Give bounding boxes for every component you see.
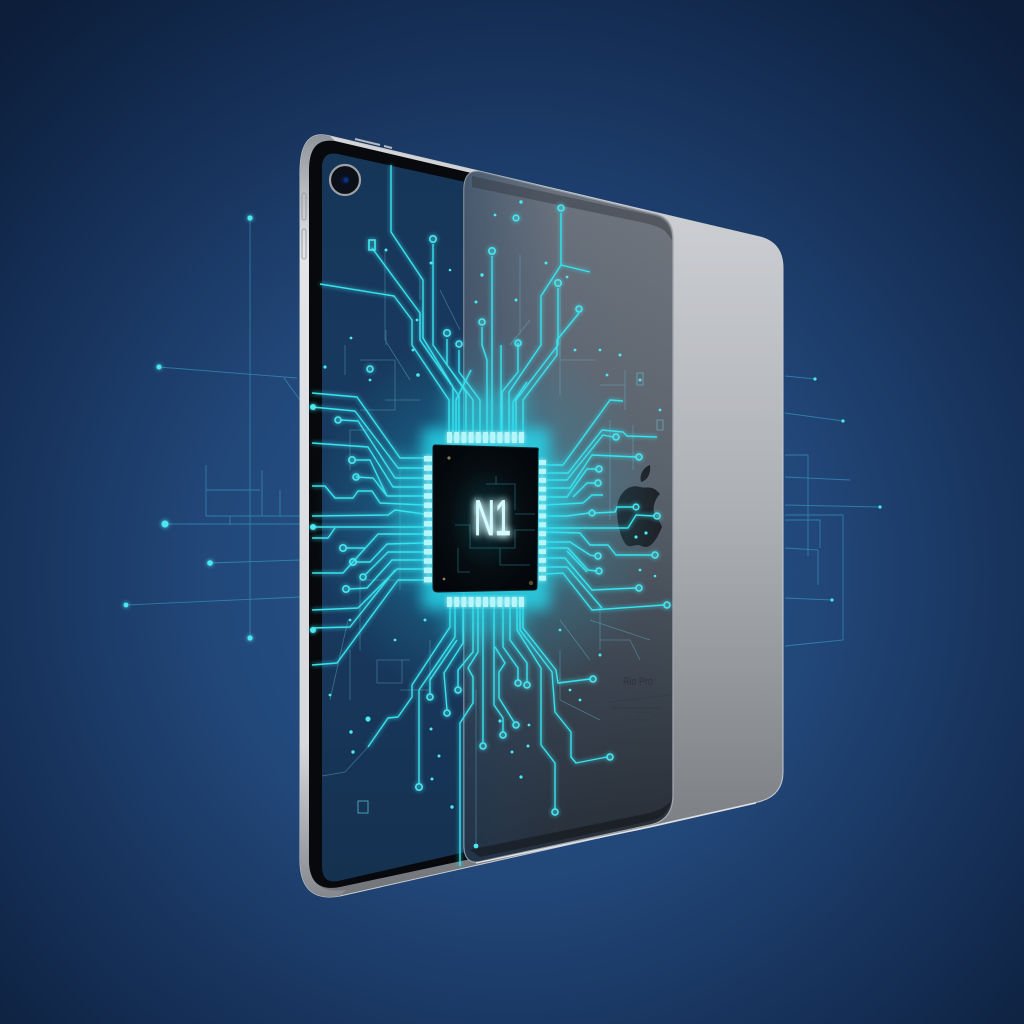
- right background circuit lines: [785, 376, 882, 646]
- model name text: Rio Pro: [623, 676, 653, 688]
- top circuit traces: [320, 165, 590, 432]
- apple logo: [617, 465, 662, 547]
- soft glow around chip: [422, 428, 550, 610]
- tablet side rim: [300, 135, 346, 897]
- chip halo glow: [311, 328, 661, 708]
- chip inner circuitry: [455, 476, 535, 572]
- left contact pads: [424, 456, 432, 582]
- bottom contact pads: [447, 597, 524, 607]
- chip label N1: N1: [474, 490, 511, 546]
- small squares: [637, 373, 663, 690]
- top contact pads: [447, 432, 524, 443]
- bottom circuit traces: [368, 607, 613, 866]
- glass dark top band: [472, 176, 672, 240]
- glass dark bottom band: [470, 800, 671, 857]
- scattered data dots: [323, 200, 661, 848]
- glass panel: [464, 171, 673, 862]
- blue screen: [322, 154, 470, 881]
- model name text: [608, 676, 670, 720]
- camera lens: [330, 165, 360, 195]
- left circuit traces: [310, 393, 424, 665]
- glow behind trace bundles: [392, 392, 574, 637]
- chip corner screws: [443, 456, 533, 585]
- side buttons: [302, 139, 392, 259]
- square marker: [358, 801, 368, 813]
- N1 processor chip: [433, 445, 538, 592]
- left background circuit lines: [124, 215, 300, 641]
- black bezel: [309, 141, 480, 888]
- faint secondary traces: [322, 250, 650, 846]
- tablet rear metal body: [300, 135, 783, 897]
- right circuit traces: [545, 400, 670, 610]
- right contact pads: [539, 460, 546, 581]
- glass bottom highlight: [476, 803, 756, 863]
